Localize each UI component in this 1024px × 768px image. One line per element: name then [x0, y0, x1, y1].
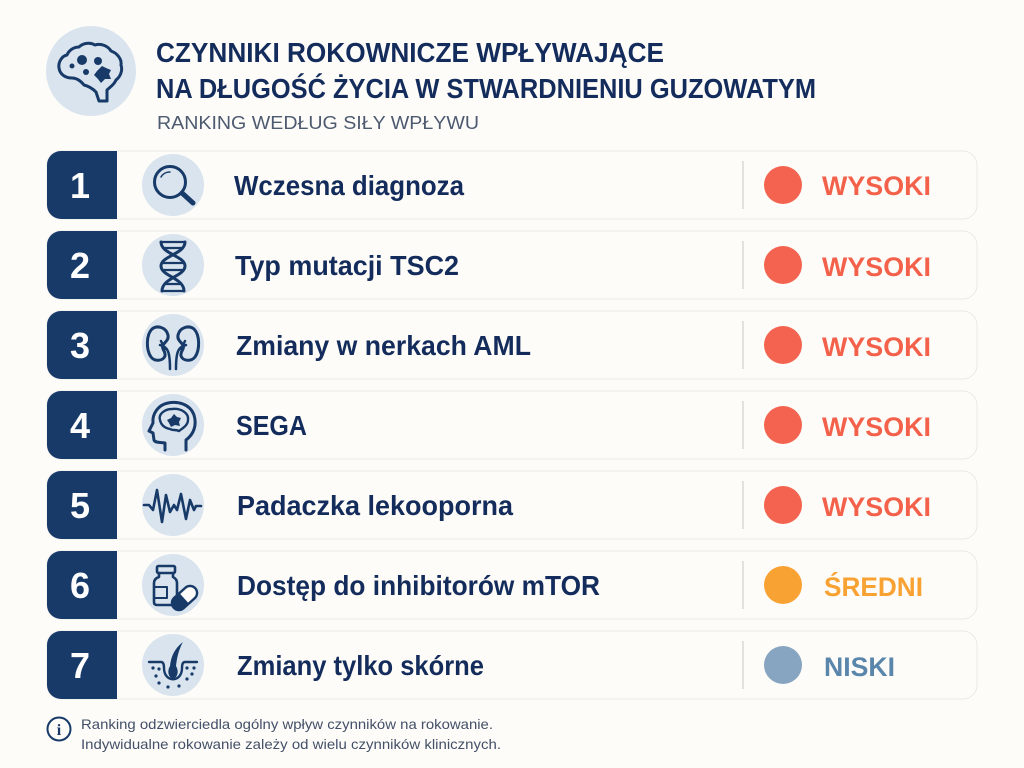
impact: high — [764, 486, 931, 524]
rank number 6 — [47, 551, 117, 619]
impact: high: WYSOKI — [822, 332, 931, 362]
impact: medium — [764, 566, 923, 604]
rank number 4 — [47, 391, 117, 459]
rank number 7 — [47, 631, 117, 699]
impact: high — [764, 406, 931, 444]
icon: info — [48, 718, 70, 740]
title: NA DŁUGOŚĆ ŻYCIA W STWARDNIENIU GUZOWATYM — [156, 73, 816, 104]
impact: high: WYSOKI — [822, 252, 931, 282]
footnote: Indywidualne rokowanie zależy od wielu czynników klinicznych. — [81, 736, 501, 752]
icon: brain with tumours — [46, 26, 136, 116]
icon: DNA helix — [142, 234, 204, 296]
icon: medicine bottle and capsule — [142, 554, 204, 616]
footnote: Ranking odzwierciedla ogólny wpływ czynników na rokowanie. — [81, 716, 493, 732]
panel: row 6 — [47, 551, 977, 619]
panel: row 1 — [47, 151, 977, 219]
rank number 3: 3 — [70, 325, 90, 366]
impact: high: WYSOKI — [822, 492, 931, 522]
title — [156, 37, 816, 104]
rank number 1 — [47, 151, 117, 219]
rank number 5: 5 — [70, 485, 90, 526]
footnote — [81, 716, 501, 752]
impact: high: WYSOKI — [822, 171, 931, 201]
panel: row 5 — [47, 471, 977, 539]
label: Padaczka lekooporna — [237, 490, 513, 521]
rank number 5 — [47, 471, 117, 539]
icon: kidneys — [142, 314, 204, 376]
rank number 1: 1 — [70, 165, 90, 206]
impact: high — [764, 246, 931, 284]
rank number 6: 6 — [70, 565, 90, 606]
panel: row 3 — [47, 311, 977, 379]
rank number 2 — [47, 231, 117, 299]
subtitle: RANKING WEDŁUG SIŁY WPŁYWU — [157, 113, 479, 133]
title: CZYNNIKI ROKOWNICZE WPŁYWAJĄCE — [156, 37, 664, 68]
impact: high: WYSOKI — [822, 412, 931, 442]
label: Zmiany tylko skórne — [237, 650, 484, 681]
rank number 2: 2 — [70, 245, 90, 286]
label: Wczesna diagnoza — [234, 170, 464, 201]
label: Dostęp do inhibitorów mTOR — [237, 570, 600, 601]
impact: high — [764, 326, 931, 364]
rank number 4: 4 — [70, 405, 90, 446]
icon: skin and hair follicle — [142, 634, 204, 696]
impact: medium: ŚREDNI — [824, 571, 923, 602]
icon: head with brain tumour — [142, 394, 204, 456]
label: Zmiany w nerkach AML — [236, 330, 531, 361]
impact: high — [764, 166, 931, 204]
rank number 7: 7 — [70, 645, 90, 686]
panel: row 4 — [47, 391, 977, 459]
icon: info: i — [57, 722, 62, 739]
panel: row 7 — [47, 631, 977, 699]
label: Typ mutacji TSC2 — [235, 250, 459, 281]
icon: magnifying glass — [142, 154, 204, 216]
impact: low: NISKI — [824, 652, 895, 682]
rank number 3 — [47, 311, 117, 379]
label: SEGA — [236, 410, 307, 441]
icon: EEG waveform — [142, 474, 204, 536]
impact: low — [764, 646, 895, 684]
panel: row 2 — [47, 231, 977, 299]
